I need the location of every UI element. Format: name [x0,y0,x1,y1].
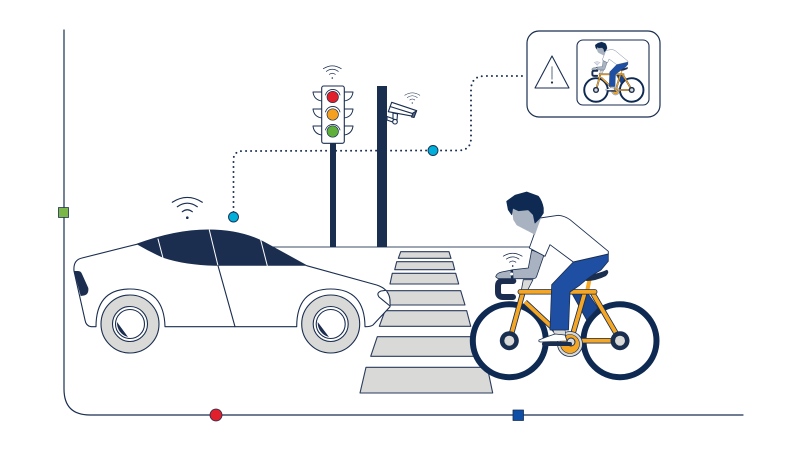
cyclist [473,192,656,377]
road horizon line [270,246,535,248]
front wheel [302,295,360,353]
car front light [378,290,390,306]
icon: traffic light [313,86,353,143]
node: car link [228,212,238,222]
car rear light [74,271,88,296]
marker: blue square [513,410,524,420]
icon: camera wifi [405,93,420,104]
alert cyclist thumbnail [577,40,649,105]
dotted connection line [234,76,526,217]
marker: red circle [210,409,222,421]
car body [74,230,390,327]
rear wheel [101,295,159,353]
icon: car wifi [172,197,202,219]
icon: warning triangle [535,56,569,88]
car [74,230,390,353]
traffic light pole [330,140,336,247]
alert panel [527,31,660,117]
car windows [137,230,307,266]
camera pole [377,86,387,247]
icon: security camera [387,102,417,124]
timeline axis [58,30,743,415]
icon: traffic light wifi [323,66,341,79]
node: camera link [428,146,438,156]
crosswalk [360,252,493,393]
marker: green square [58,208,68,218]
